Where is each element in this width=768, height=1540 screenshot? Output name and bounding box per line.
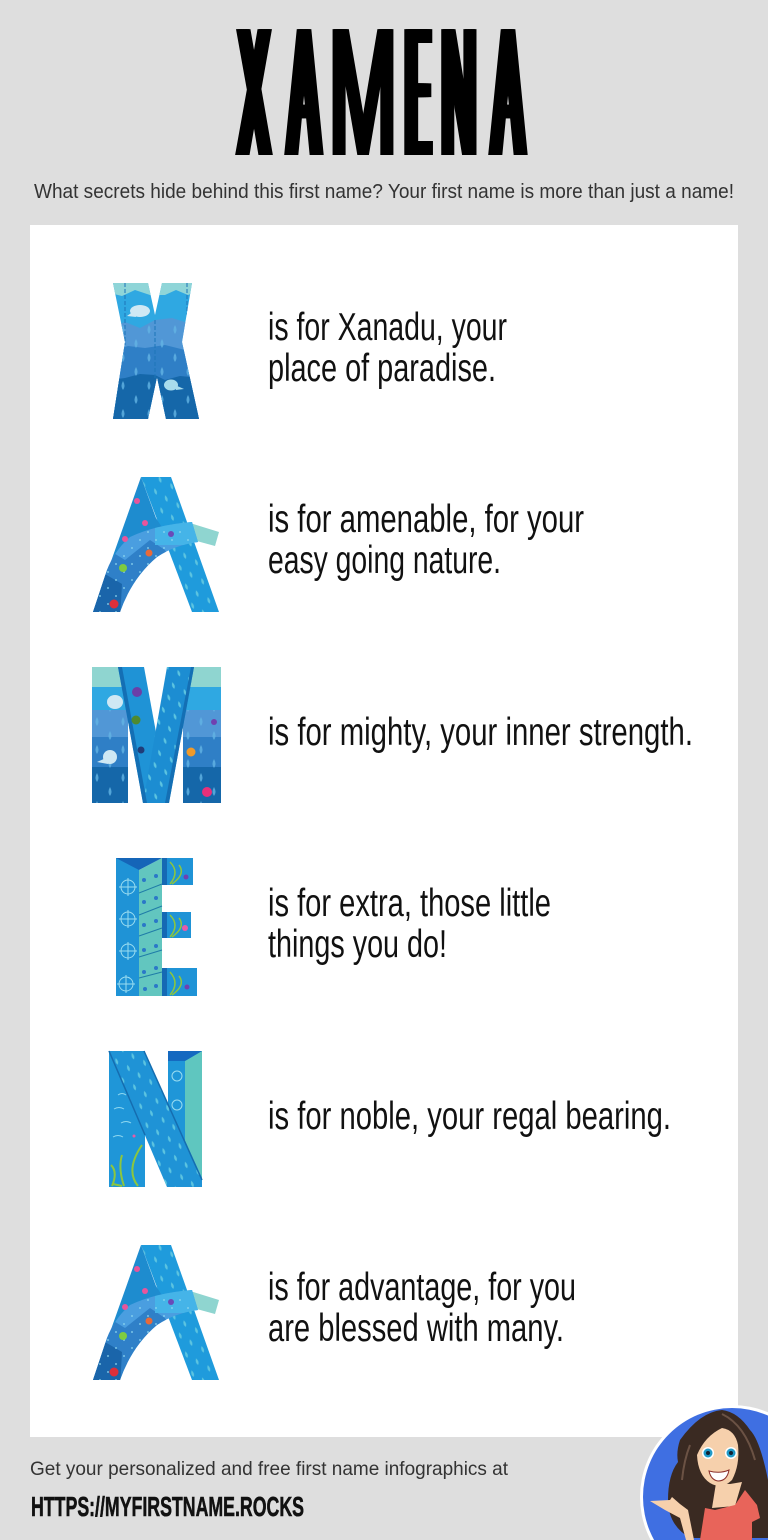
- footer text: Get your personalized and free first name infographics at: [30, 1458, 509, 1480]
- footer url: HTTPS://MYFIRSTNAME.ROCKS: [31, 1491, 304, 1522]
- title: [235, 0, 528, 194]
- subtitle: What secrets hide behind this first name? Your first name is more than just a name!: [34, 180, 734, 203]
- text: A2 line 2: are blessed with many.: [268, 1307, 564, 1350]
- icon: letter X with sea bands and whales: [113, 283, 199, 419]
- icon: letter A with arch: [90, 477, 219, 620]
- text: E line: is for extra, those little: [268, 882, 551, 925]
- icon: letter N: [109, 1051, 202, 1187]
- panel: white content card: [30, 225, 738, 1437]
- icon: letter E: [116, 858, 197, 996]
- text: X line: is for Xanadu, your: [268, 306, 507, 349]
- text: X line 2: place of paradise.: [268, 347, 496, 390]
- icon: letter A repeat: [90, 1245, 219, 1388]
- icon: letter M: [90, 665, 223, 805]
- text: E line 2: things you do!: [268, 923, 447, 966]
- avatar: woman in blue circle: [640, 1405, 768, 1540]
- text: A line 2: easy going nature.: [268, 539, 501, 582]
- text: A2 line: is for advantage, for you: [268, 1266, 576, 1309]
- text: A line: is for amenable, for your: [268, 498, 584, 541]
